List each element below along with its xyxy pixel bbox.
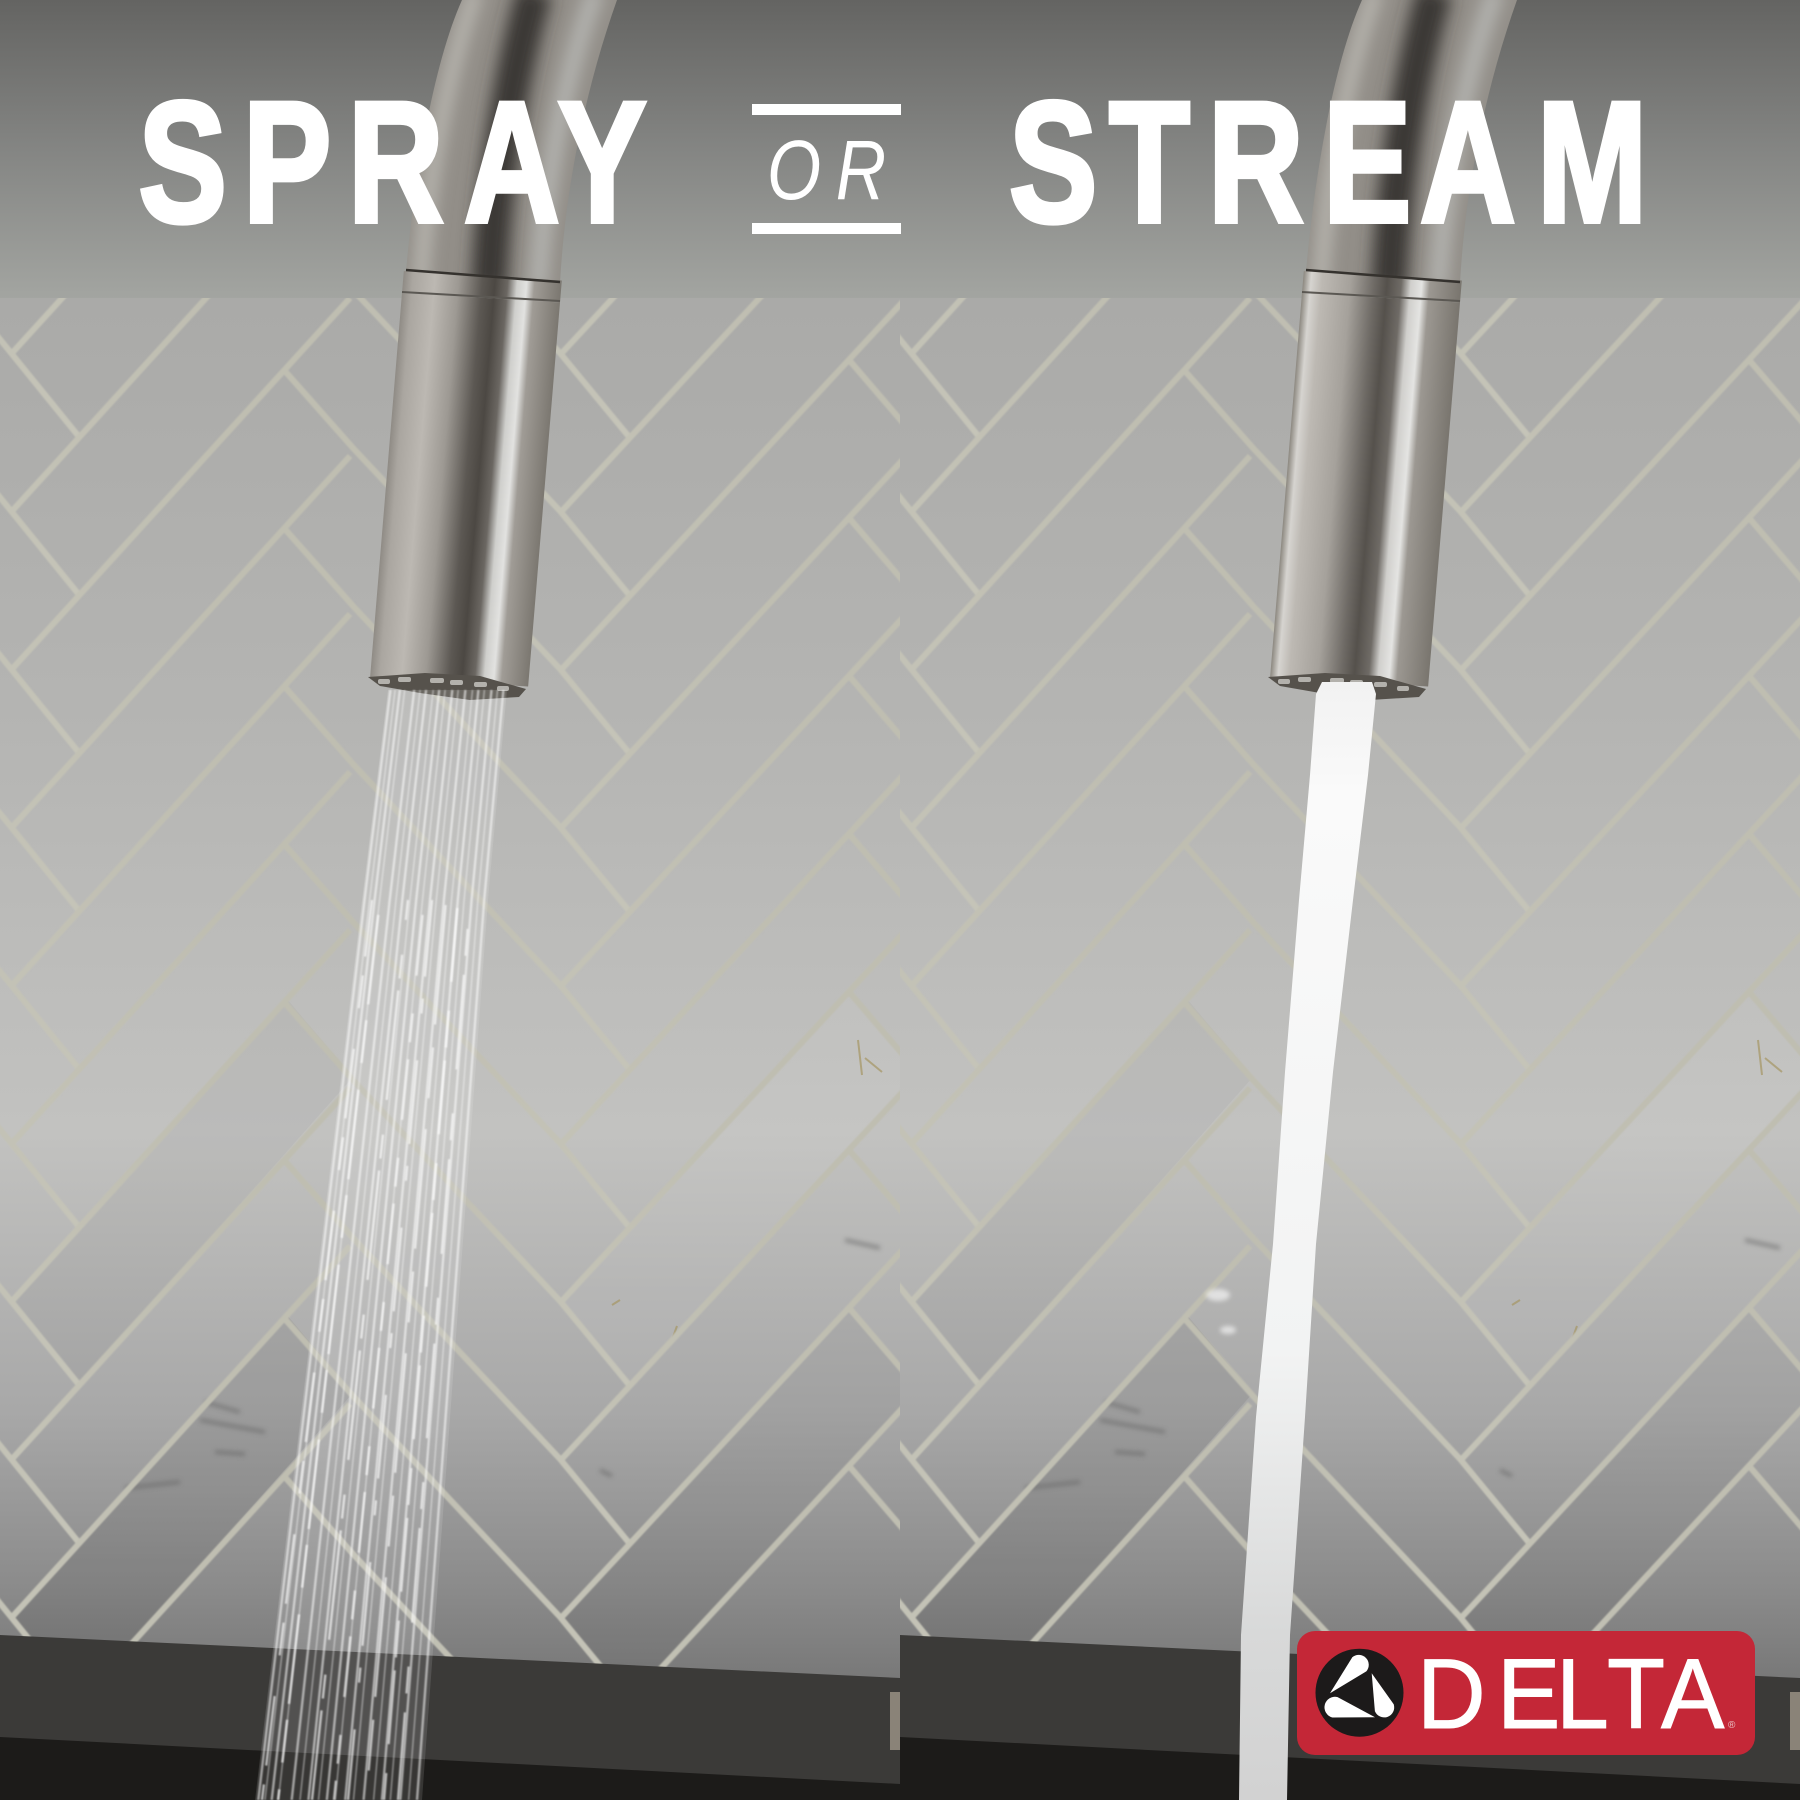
stream water bbox=[1239, 682, 1376, 1800]
herringbone tile wall left bbox=[0, 0, 1190, 1800]
panel: right scene bbox=[800, 0, 1800, 1800]
countertop left bbox=[0, 1635, 900, 1800]
wet reflection on tile bbox=[1206, 1289, 1236, 1334]
logo wordmark: DELTA bbox=[1417, 1638, 1725, 1749]
divider with OR bbox=[752, 104, 901, 234]
icon: Delta triangle mark bbox=[1316, 1649, 1404, 1737]
herringbone tile wall right bbox=[800, 0, 1800, 1800]
upper wall band right bbox=[900, 0, 1800, 299]
heading: SPRAY: SPRAY bbox=[139, 66, 646, 258]
heading: STREAM: STREAM bbox=[1009, 66, 1647, 258]
countertop right bbox=[900, 1635, 1800, 1800]
upper wall band left bbox=[0, 0, 900, 299]
panel: left scene bbox=[0, 0, 1190, 1800]
logo: Delta badge bbox=[1297, 1631, 1755, 1755]
divider with OR: OR bbox=[767, 124, 886, 217]
faucet right bbox=[1268, 0, 1520, 700]
registered mark: ® bbox=[1728, 1720, 1736, 1731]
faucet left bbox=[368, 0, 620, 700]
spray water bbox=[255, 690, 507, 1800]
